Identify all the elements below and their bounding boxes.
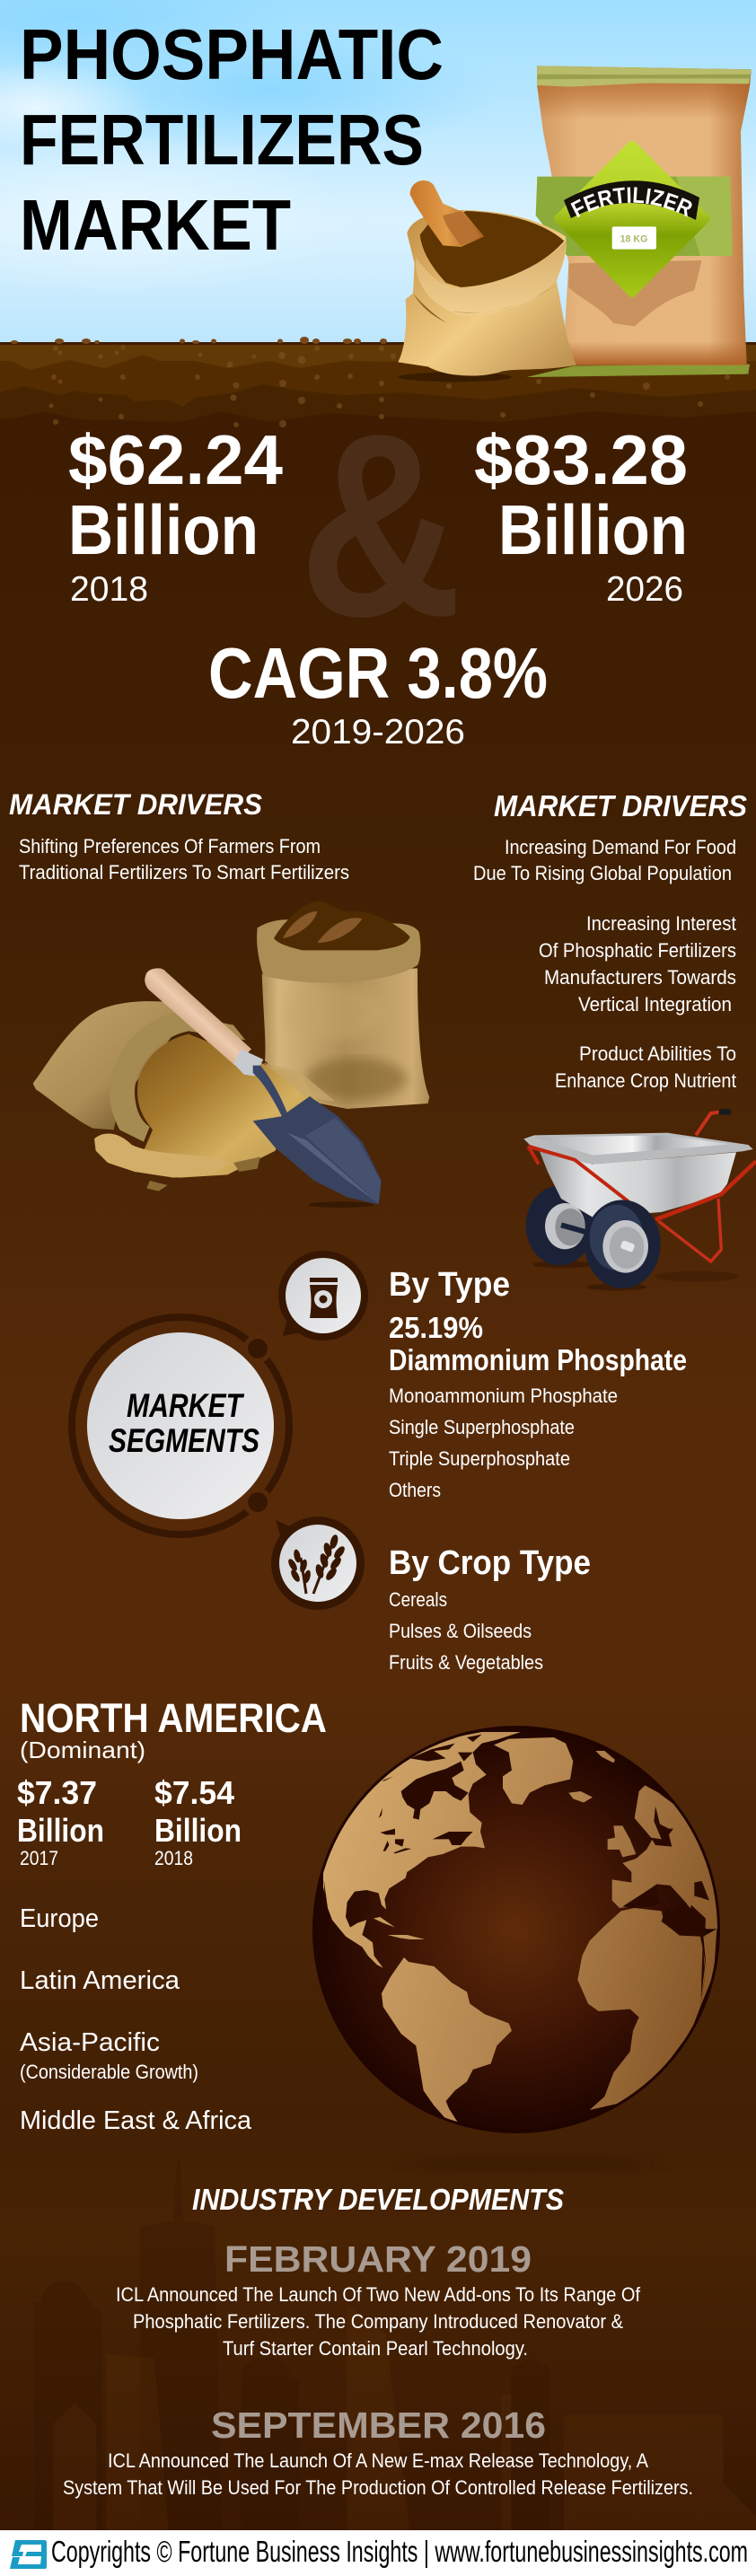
segment list: by crop type (389, 1544, 591, 1674)
icon: company logo (10, 2540, 47, 2569)
regional stats: $7.37 (17, 1774, 97, 1811)
stat: 2026 market value: 2026 (606, 570, 683, 609)
market drivers left: MARKET DRIVERS (9, 788, 263, 821)
regional stats: $7.54 (154, 1774, 234, 1811)
tipped sack (33, 1001, 335, 1191)
segment label: MARKET (127, 1387, 245, 1424)
industry developments: Phosphatic Fertilizers. The Company Introduced Renovator & (133, 2310, 623, 2333)
segment list: by crop type: Cereals (389, 1588, 447, 1611)
industry developments: FEBRUARY 2019 (224, 2238, 532, 2280)
segment label (109, 1387, 259, 1459)
segment list: by crop type: Pulses & Oilseeds (389, 1620, 532, 1642)
CAGR: 2019-2026 (291, 713, 465, 752)
illustration: globe (312, 1726, 720, 2133)
illustration: fertilizer bag (527, 66, 752, 377)
weight tag: 18 KG (620, 233, 647, 244)
market drivers left: Traditional Fertilizers To Smart Fertilizers (19, 861, 349, 884)
trowel (145, 968, 382, 1205)
industry developments: INDUSTRY DEVELOPMENTS (192, 2183, 564, 2216)
segment list: by type: Triple Superphosphate (389, 1447, 570, 1470)
industry developments: Turf Starter Contain Pearl Technology. (223, 2337, 528, 2360)
illustration: sacks and trowel (33, 901, 429, 1208)
market drivers right: MARKET DRIVERS (494, 789, 747, 822)
industry developments: System That Will Be Used For The Production Of Controlled Release Fertilizers. (63, 2476, 693, 2499)
regional stats: 2017 (20, 1847, 58, 1869)
stat: 2026 market value: Billion (498, 490, 688, 569)
regional stats: NORTH AMERICA (20, 1695, 327, 1741)
stat: 2018 market value: 2018 (70, 570, 148, 609)
segment list: by type: Monoammonium Phosphate (389, 1385, 618, 1407)
segment label: SEGMENTS (109, 1422, 259, 1459)
market drivers left (9, 788, 349, 884)
market drivers right: Increasing Interest (586, 912, 736, 935)
segment list: by type: Others (389, 1479, 441, 1501)
stat: 2018 market value (68, 420, 283, 609)
title (20, 14, 444, 265)
segment list: by type: 25.19% (389, 1311, 483, 1344)
regional stats: Europe (20, 1904, 99, 1933)
CAGR (208, 633, 548, 752)
illustration: open burlap sack with scoop (398, 180, 576, 382)
market drivers right (473, 789, 747, 1092)
regional stats: Billion (17, 1812, 104, 1849)
segment list: by type: Single Superphosphate (389, 1416, 575, 1438)
market drivers right: Of Phosphatic Fertilizers (539, 939, 736, 962)
bag label: FERTILIZER: FERTILIZER (571, 187, 692, 217)
regional stats: (Dominant) (20, 1736, 145, 1763)
stat: 2018 market value: $62.24 (68, 420, 283, 499)
market drivers right: Vertical Integration (578, 993, 732, 1015)
city skyline backdrop (34, 2155, 756, 2530)
regional stats: 2018 (154, 1847, 193, 1869)
segment ring (72, 1317, 289, 1534)
regional stats: Middle East & Africa (20, 2106, 252, 2135)
market drivers right: Manufacturers Towards (544, 966, 736, 989)
market drivers left: Shifting Preferences Of Farmers From (19, 835, 321, 857)
market drivers right: Increasing Demand For Food (505, 836, 736, 858)
upright sack (257, 901, 429, 1109)
segment list: by type: Diammonium Phosphate (389, 1343, 687, 1376)
regional stats: Asia-Pacific (20, 2028, 160, 2057)
market drivers right: Due To Rising Global Population (473, 862, 732, 884)
industry developments: ICL Announced The Launch Of Two New Add-ons To Its Range Of (116, 2283, 641, 2306)
stat: 2026 market value (474, 420, 688, 609)
footer (0, 2530, 756, 2576)
soil layers (0, 337, 756, 450)
segment list: by type: By Type (389, 1266, 510, 1304)
icon: wheat (271, 1517, 365, 1610)
weight tag (612, 226, 656, 250)
title: FERTILIZERS (20, 100, 424, 180)
icon: fertilizer bag (278, 1251, 368, 1341)
regional stats (17, 1695, 327, 2135)
segment list: by crop type: By Crop Type (389, 1544, 591, 1582)
illustration: wheelbarrow (523, 1109, 756, 1290)
panel: market segments (72, 1251, 687, 1674)
segment list: by crop type: Fruits & Vegetables (389, 1651, 543, 1674)
segment list: by type (389, 1266, 687, 1501)
regional stats: Latin America (20, 1966, 180, 1995)
market drivers right: Product Abilities To (579, 1042, 736, 1065)
industry developments (63, 2183, 693, 2499)
sky (0, 0, 756, 345)
stat: 2026 market value: $83.28 (474, 420, 688, 499)
market drivers right: Enhance Crop Nutrient (555, 1069, 736, 1092)
industry developments: ICL Announced The Launch Of A New E-max Release Technology, A (108, 2449, 648, 2472)
title: MARKET (20, 185, 291, 265)
regional stats: Billion (154, 1812, 242, 1849)
CAGR: CAGR 3.8% (208, 633, 548, 713)
ampersand watermark: & (299, 380, 462, 671)
stat: 2018 market value: Billion (68, 490, 259, 569)
title: PHOSPHATIC (20, 14, 444, 94)
regional stats: (Considerable Growth) (20, 2061, 198, 2083)
industry developments: SEPTEMBER 2016 (211, 2405, 546, 2446)
